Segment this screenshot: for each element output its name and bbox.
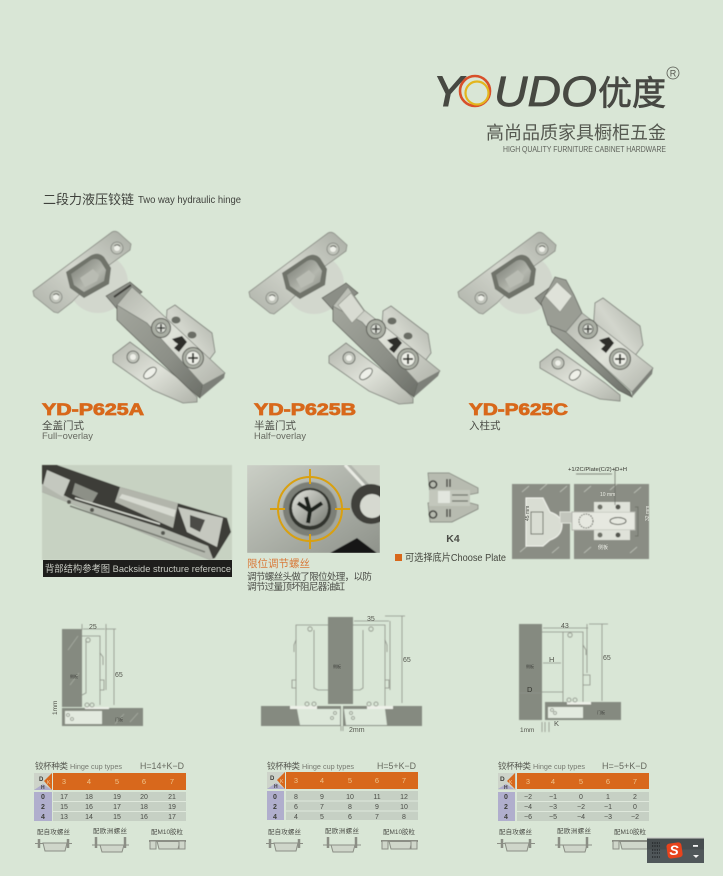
dimension 43: 43	[561, 623, 569, 630]
data rows: 7	[375, 814, 379, 821]
header row: 5	[115, 777, 119, 786]
header row	[517, 773, 649, 789]
header row: 3	[294, 776, 298, 785]
choose plate label: 可选择底片Choose Plate	[405, 551, 506, 564]
toolbar minimize	[693, 845, 698, 847]
header row: 6	[606, 777, 610, 786]
header row: 4	[320, 776, 324, 785]
data rows: 17	[168, 814, 176, 821]
data rows: −3	[549, 804, 557, 811]
mounting plan annotations: +1/2C/Plate(C/2)+D+H	[568, 467, 627, 473]
corner cell: H	[41, 785, 45, 791]
accessory icons	[266, 837, 418, 852]
clearance diagram: full overlay	[52, 624, 143, 726]
data rows: 6	[294, 804, 298, 811]
corner cell: K	[280, 779, 284, 785]
header row: 3	[526, 777, 530, 786]
accessory icons	[497, 837, 648, 852]
mounting plan annotations: 45 mm	[525, 506, 531, 521]
data rows: 2	[633, 794, 637, 801]
mounting plan diagram	[512, 468, 649, 559]
choose plate bullet	[395, 554, 402, 561]
registered mark	[667, 67, 679, 79]
row headers	[267, 791, 284, 821]
logo ring O	[460, 76, 490, 106]
dimension 35: 35	[367, 616, 375, 623]
overlay type A: Full−overlay	[42, 431, 93, 442]
hinge photo C	[458, 232, 653, 401]
overlay type A: 全盖门式	[42, 419, 84, 432]
table title: 铰杯种类	[35, 761, 68, 771]
table title: Hinge cup types	[302, 762, 354, 771]
panel labels: 侧板	[526, 663, 534, 669]
accessory labels: 配欧洲螺丝	[557, 826, 592, 835]
mounting plan annotations: 侧板	[598, 544, 608, 551]
dimension 65: 65	[403, 657, 411, 664]
data rows	[517, 792, 649, 821]
row headers: 0	[504, 794, 508, 801]
corner cell	[498, 773, 516, 791]
limit screw description: 调节过量顶坏阻尼器油缸	[247, 581, 345, 593]
dimension 2mm: 2mm	[349, 727, 365, 734]
accessory labels: 配M10胶粒	[383, 827, 415, 836]
data rows: −1	[604, 804, 612, 811]
row headers: 2	[273, 804, 277, 811]
data rows	[286, 791, 418, 821]
accessory labels: 配M10胶粒	[614, 827, 646, 836]
corner cell	[34, 773, 52, 791]
caption bar	[43, 560, 232, 577]
header row: 7	[170, 777, 174, 786]
table title	[35, 761, 184, 771]
row headers: 0	[41, 794, 45, 801]
accessory labels	[499, 826, 646, 836]
data rows: −4	[577, 814, 585, 821]
data rows: −2	[524, 794, 532, 801]
dimension H: H	[549, 655, 554, 664]
data rows: 0	[633, 804, 637, 811]
hinge photo B	[249, 232, 440, 404]
dimension D: D	[527, 685, 533, 694]
dimension 65: 65	[115, 672, 123, 679]
registered mark: R	[670, 68, 677, 78]
data rows: 8	[348, 804, 352, 811]
data rows: 6	[348, 814, 352, 821]
data rows: 13	[60, 814, 68, 821]
header row: 7	[633, 777, 637, 786]
toolbar grip dots	[652, 843, 660, 857]
panel labels	[526, 663, 605, 715]
clearance diagram: half overlay	[261, 616, 422, 734]
dimension 25: 25	[89, 624, 97, 631]
accessory labels: 配自攻螺丝	[268, 827, 302, 836]
sogou S icon: S	[669, 842, 679, 858]
corner cell: H	[274, 784, 278, 790]
table title: Hinge cup types	[70, 762, 122, 771]
brand logo	[433, 67, 679, 116]
table title: H=5+K−D	[377, 761, 416, 771]
data rows: 1	[606, 794, 610, 801]
data rows: 8	[402, 814, 406, 821]
data rows: −4	[524, 804, 532, 811]
panel labels: 侧板	[70, 673, 78, 679]
dimension 1mm: 1mm	[52, 701, 59, 715]
accessory labels	[268, 826, 415, 836]
overlay type B: 半盖门式	[254, 419, 296, 432]
mounting plan annotations: 10 mm	[600, 492, 615, 498]
header row: 4	[551, 777, 555, 786]
data rows	[53, 792, 186, 821]
accessory icons	[35, 837, 186, 852]
data rows: 17	[60, 794, 68, 801]
data rows: 9	[320, 794, 324, 801]
data rows: −2	[631, 814, 639, 821]
toolbar arrow	[693, 855, 699, 858]
accessory labels: 配欧洲螺丝	[93, 826, 128, 835]
limit screw heading: 限位调节螺丝	[247, 557, 310, 570]
table title: H=−5+K−D	[602, 761, 647, 771]
header row: 5	[579, 777, 583, 786]
corner cell: D	[270, 776, 275, 782]
hinge photo A	[33, 231, 225, 403]
data rows: 11	[373, 794, 381, 801]
logo wordmark: Y	[433, 68, 466, 116]
data rows: 14	[85, 814, 93, 821]
header row	[286, 772, 418, 789]
data rows: 15	[113, 814, 121, 821]
header row: 6	[375, 776, 379, 785]
limit screw description: 调节螺丝头做了限位处理，以防	[247, 571, 372, 583]
data rows: −3	[604, 814, 612, 821]
data rows: 16	[140, 814, 148, 821]
row headers: 0	[273, 794, 277, 801]
panel labels: 门板	[115, 716, 123, 722]
model name B: YD-P625B	[254, 401, 356, 419]
table title: 铰杯种类	[498, 761, 531, 771]
data rows: 20	[140, 794, 148, 801]
table: hinge cup types A	[34, 761, 186, 852]
data rows: 18	[85, 794, 93, 801]
limit screw description	[247, 571, 372, 593]
clearance diagram: inset	[519, 623, 621, 734]
crosshair marker	[270, 469, 350, 549]
caption text: 背部结构参考图 Backside structure reference	[45, 563, 231, 575]
corner cell: D	[39, 777, 44, 783]
header row: 5	[348, 776, 352, 785]
overlay type B: Half−overlay	[254, 431, 306, 442]
data rows: −6	[524, 814, 532, 821]
corner cell: H	[504, 785, 508, 791]
overlay type C: 入柱式	[469, 419, 501, 432]
data rows: −5	[549, 814, 557, 821]
row headers: 2	[504, 804, 508, 811]
input method toolbar widget	[647, 837, 704, 863]
data rows: 19	[168, 804, 176, 811]
header row: 7	[402, 776, 406, 785]
data rows: 16	[85, 804, 93, 811]
corner cell: K	[47, 780, 51, 786]
corner cell: D	[500, 776, 505, 783]
header row	[53, 773, 186, 790]
K4 label: K4	[446, 533, 460, 545]
dimension K: K	[554, 719, 559, 728]
mounting plan annotations: 32 mm	[645, 506, 651, 521]
row headers: 4	[41, 814, 45, 821]
panel labels	[70, 673, 123, 722]
logo wordmark end: UDO	[494, 68, 597, 116]
logo chinese name: 优度	[598, 75, 666, 113]
accessory labels: 配自攻螺丝	[499, 827, 532, 836]
row headers	[34, 792, 52, 821]
data rows: −2	[577, 804, 585, 811]
section heading	[43, 192, 241, 207]
panel labels: 门板	[597, 709, 605, 715]
header row: 6	[142, 777, 146, 786]
accessory labels	[37, 826, 183, 836]
limit screw photo	[247, 465, 391, 553]
model name C: YD-P625C	[469, 401, 568, 419]
backside structure photo	[42, 465, 232, 577]
dimension 65: 65	[603, 655, 611, 662]
accessory labels: 配M10胶粒	[151, 827, 183, 836]
row headers	[498, 792, 515, 821]
data rows: 10	[400, 804, 408, 811]
data rows: 10	[346, 794, 354, 801]
header row: 3	[62, 777, 66, 786]
data rows: 18	[140, 804, 148, 811]
data rows: 12	[400, 794, 408, 801]
data rows: 9	[375, 804, 379, 811]
section heading: 二段力液压铰链	[43, 192, 134, 207]
row headers: 4	[504, 814, 508, 821]
data rows: 19	[113, 794, 121, 801]
accessory labels: 配欧洲螺丝	[325, 826, 360, 835]
data rows: 4	[294, 814, 298, 821]
header row: 4	[87, 777, 91, 786]
tagline chinese: 高尚品质家具橱柜五金	[486, 123, 666, 143]
overlay type B	[254, 419, 306, 442]
table title	[267, 761, 416, 771]
corner cell: K	[509, 780, 513, 786]
data rows: 17	[113, 804, 121, 811]
table title	[498, 761, 647, 771]
table: hinge cup types C	[497, 761, 649, 852]
data rows: 0	[579, 794, 583, 801]
accessory labels: 配自攻螺丝	[37, 827, 70, 836]
plate K4 photo	[428, 473, 478, 522]
overlay type A	[42, 419, 93, 442]
data rows: 8	[294, 794, 298, 801]
table title: Hinge cup types	[533, 762, 585, 771]
row headers: 4	[273, 814, 277, 821]
data rows: 5	[320, 814, 324, 821]
data rows: 15	[60, 804, 68, 811]
data rows: 7	[320, 804, 324, 811]
section heading: Two way hydraulic hinge	[138, 195, 241, 206]
table title: H=14+K−D	[140, 761, 184, 771]
table title: 铰杯种类	[267, 761, 300, 771]
data rows: 21	[168, 794, 176, 801]
row headers: 2	[41, 804, 45, 811]
corner cell	[267, 772, 285, 790]
model name A: YD-P625A	[42, 401, 144, 419]
data rows: −1	[549, 794, 557, 801]
mounting plan annotations	[525, 467, 651, 551]
panel label: 侧板	[333, 663, 341, 669]
dimension 1mm: 1mm	[520, 727, 534, 734]
table: hinge cup types B	[266, 761, 418, 852]
tagline english: HIGH QUALITY FURNITURE CABINET HARDWARE	[503, 145, 666, 154]
